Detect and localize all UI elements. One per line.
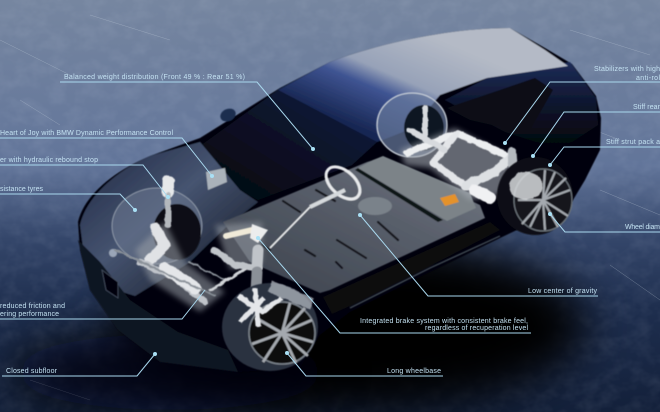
callout: heart of joy: Heart of Joy with BMW Dynamic Performance Control xyxy=(0,130,173,137)
callout: long wheelbase xyxy=(285,351,443,376)
grille xyxy=(102,270,118,298)
callout: resistance tyres xyxy=(0,186,137,212)
callout: low center of gravity: Low center of gravity xyxy=(528,288,598,295)
rear left transparent wheel xyxy=(377,93,447,157)
callout: stabilizers: anti-rol xyxy=(636,75,660,82)
front right wheel xyxy=(222,283,318,371)
car body xyxy=(78,28,601,372)
callout: stabilizers xyxy=(503,66,660,145)
rear right wheel xyxy=(497,157,573,235)
mirror hub bracket xyxy=(206,168,227,190)
front bumper xyxy=(78,240,238,372)
battery ribs xyxy=(262,190,398,268)
steering wheel xyxy=(320,161,366,205)
front left transparent wheel xyxy=(112,188,202,264)
rear knuckle xyxy=(509,172,543,200)
callout: stabilizers: Stabilizers with high xyxy=(594,66,660,73)
front suspension glow xyxy=(135,222,262,312)
callout: integrated brake system: Integrated brake system with consistent brake feel, xyxy=(360,318,528,325)
callout: resistance tyres: sistance tyres xyxy=(0,186,44,193)
callout: long wheelbase: Long wheelbase xyxy=(387,368,441,375)
side windows xyxy=(447,78,553,130)
callout: hydraulic rebound stop: er with hydraulic rebound stop xyxy=(0,157,98,164)
callout: reduced friction: reduced friction and xyxy=(0,303,65,310)
callout: heart of joy xyxy=(0,130,214,178)
callout: stiff rear: Stiff rear xyxy=(633,104,660,111)
callout: reduced friction: ering performance xyxy=(0,311,59,318)
roof xyxy=(278,28,568,142)
callout: hydraulic rebound stop xyxy=(0,157,170,199)
windshield xyxy=(200,90,377,200)
callout: integrated brake system: regardless of recuperation level xyxy=(425,325,528,332)
badge xyxy=(109,249,117,257)
callout: low center of gravity xyxy=(358,213,598,296)
front suspension xyxy=(115,181,258,302)
callout: stiff strut pack xyxy=(548,139,660,167)
mirror xyxy=(218,106,238,124)
callout: wheel diameter: Wheel diam xyxy=(625,224,660,231)
callout: balanced weight distribution xyxy=(60,74,315,151)
callout: stiff strut pack: Stiff strut pack a xyxy=(606,139,660,146)
callout: balanced weight distribution: Balanced weight distribution (Front 49 % : Rear 51 %) xyxy=(64,74,245,81)
floor hump xyxy=(358,197,392,215)
callout: integrated brake system xyxy=(256,236,531,333)
battery module xyxy=(358,156,476,221)
rear quarter panel xyxy=(445,62,598,150)
callout: closed subfloor xyxy=(2,352,157,376)
callout: closed subfloor: Closed subfloor xyxy=(6,368,58,375)
rear subframe xyxy=(407,108,514,198)
rear subframe glow xyxy=(400,128,515,200)
callout: wheel diameter xyxy=(548,212,660,232)
front wheel splash xyxy=(238,286,312,326)
callout: stiff rear xyxy=(531,104,660,158)
battery floor platform xyxy=(223,156,500,314)
front strut arm xyxy=(226,224,268,292)
hood xyxy=(80,142,258,296)
callout: reduced friction xyxy=(0,290,205,319)
